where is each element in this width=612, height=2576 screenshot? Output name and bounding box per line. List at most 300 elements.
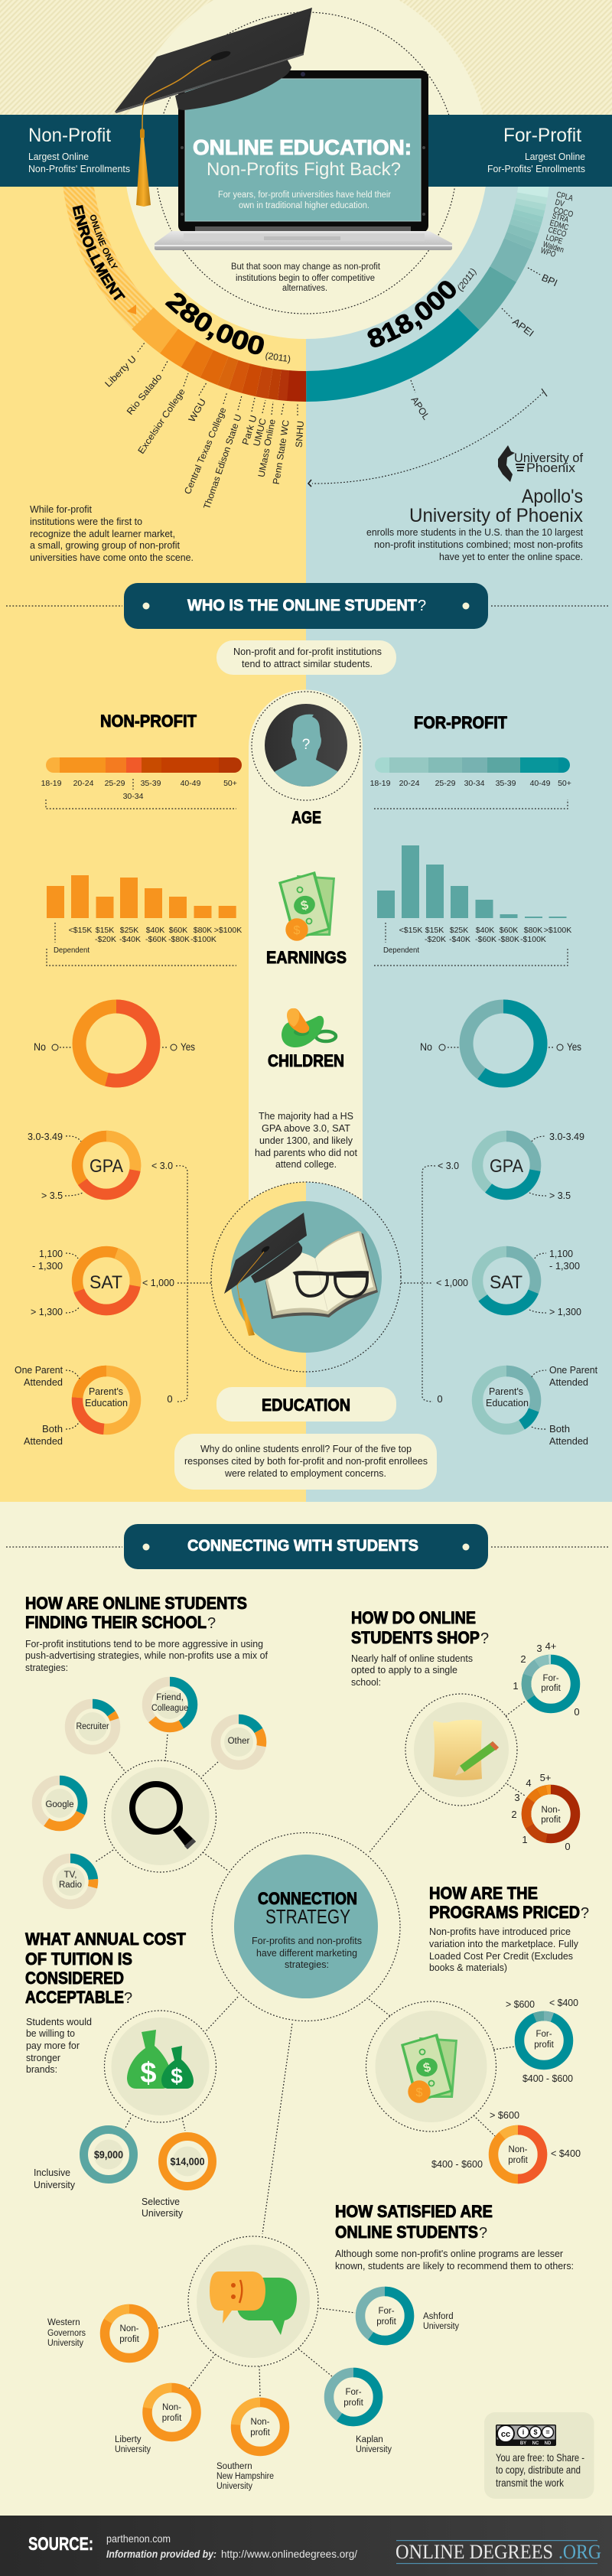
donut: shop for-profit: For- (542, 1674, 559, 1683)
logo: online degrees: ONLINE DEGREES (396, 2541, 553, 2563)
center education text: GPA above 3.0, SAT (262, 1123, 350, 1134)
donut: ashford: Ashford (423, 2312, 454, 2321)
background: for-profit blue side (306, 115, 612, 1502)
parents education donut: for-profit: Parent's (489, 1386, 523, 1397)
for-profit ticker labels: APOL (409, 395, 431, 422)
earnings histogram: for-profit: -$80K (498, 935, 519, 944)
earnings histogram: non-profit: <$15K (69, 926, 92, 935)
donut: price non-profit: Non- (509, 2145, 528, 2154)
earnings histogram: for-profit: $40K (476, 926, 494, 935)
donut: shop non-profit: Non- (542, 1806, 561, 1815)
GPA donut: for-profit: GPA (490, 1156, 523, 1177)
GPA donut: non-profit: < 3.0 (151, 1160, 173, 1171)
donut: western governors: University (47, 2339, 83, 2348)
earnings histogram: for-profit: Dependent (383, 946, 419, 955)
inner cream disc (124, 0, 488, 339)
donut: tv, radio: Radio (59, 1881, 82, 1890)
heading block: how are programs priced: ? (581, 1905, 589, 1922)
non-profit school labels: Park U (240, 414, 259, 446)
parents education donut: non-profit: Education (85, 1398, 128, 1408)
donut: shop for-profit: 1 (513, 1680, 519, 1692)
for-profit header text: For-Profits' Enrollments (487, 164, 585, 174)
SAT donut: for-profit: < 1,000 (436, 1277, 468, 1288)
callout: similar students: tend to attract similar students. (242, 659, 373, 669)
parents education donut: non-profit: Attended (24, 1376, 63, 1388)
SAT donut: non-profit (31, 1248, 174, 1317)
label: enrollment: ENROLLMENT (72, 205, 125, 301)
for-profit ticker labels: DV (554, 197, 565, 209)
earnings histogram: non-profit: $60K (169, 926, 187, 935)
ring: $14,000 selective university: $14,000 (170, 2155, 205, 2167)
solid cream circle with dashed outline behind laptop (155, 12, 457, 314)
SAT donut: non-profit: SAT (90, 1272, 122, 1293)
donut: kaplan: Kaplan (356, 2435, 383, 2444)
non-profit header text (28, 125, 130, 174)
dashed connectors: shop (369, 1702, 525, 1853)
donut: price non-profit: profit (508, 2156, 529, 2165)
donut: friend, colleague: Colleague (151, 1704, 188, 1713)
donut: google: Google (45, 1800, 74, 1809)
heading block: annual cost of tuition (25, 1930, 187, 2075)
non-profit intro text: recognize the adult learner market, (30, 529, 175, 539)
donut: western governors: Western (47, 2318, 80, 2327)
title on laptop screen: Non-Profits Fight Back? (207, 159, 401, 180)
donut: price for-profit (506, 1997, 578, 2084)
donut: kaplan: University (356, 2445, 392, 2454)
age bar: non-profit: 40-49 (181, 779, 201, 788)
dashed connectors: price (369, 1999, 515, 2136)
cream text below laptop: alternatives. (282, 284, 327, 293)
background: connecting section (0, 1502, 612, 2516)
icon: cc badge (496, 2425, 556, 2446)
for-profit ticker labels: CPLA (555, 190, 574, 204)
donut: shop non-profit (511, 1772, 575, 1852)
donut: price for-profit: For- (536, 2030, 552, 2039)
non-profit intro text: While for-profit (30, 504, 93, 515)
age bar: for-profit: 40-49 (530, 779, 551, 788)
icon: paper and pencil (405, 1694, 517, 1806)
header band (0, 115, 612, 187)
Apollo's callout text: Apollo's (522, 486, 583, 507)
earnings histogram: for-profit: -$20K (425, 935, 446, 944)
earnings histogram: for-profit: -$40K (449, 935, 470, 944)
SAT donut: for-profit: 1,100 (549, 1248, 573, 1259)
earnings histogram: non-profit: $15K (96, 926, 114, 935)
heading block: how satisfied: ? (479, 2225, 487, 2242)
donut: southern new hampshire: University (216, 2482, 252, 2491)
earnings histogram: non-profit: $25K (120, 926, 138, 935)
non-profit ring segments (76, 0, 536, 386)
heading block: annual cost of tuition: brands: (26, 2064, 57, 2075)
non-profit school labels: Penn State WC (271, 419, 291, 485)
age bar: for-profit: 30-34 (464, 779, 485, 788)
dashed connectors: tuition (125, 1997, 238, 2131)
footer: Information provided by: (106, 2548, 216, 2560)
central cream column (249, 690, 363, 1277)
logo: University of Phoenix: University of (514, 451, 583, 465)
donut: shop for-profit: 3 (536, 1643, 542, 1654)
Apollo's callout text: have yet to enter the online space. (439, 552, 583, 562)
donut: shop non-profit: 0 (565, 1841, 571, 1852)
for-profit header text (487, 125, 585, 174)
heading: for-profit: FOR-PROFIT (414, 713, 508, 732)
for-profit ticker labels: EDMC (549, 218, 570, 233)
donut: liberty (115, 2388, 196, 2454)
donut: shop for-profit: 4+ (545, 1640, 556, 1652)
parents education donut: for-profit (477, 1364, 597, 1447)
children donut: non-profit: Yes (181, 1040, 195, 1053)
center education text: under 1300, and likely (259, 1135, 353, 1146)
donut: kaplan: For- (345, 2388, 362, 2397)
donut: price for-profit: profit (534, 2040, 555, 2050)
earnings histogram: for-profit: $60K (500, 926, 518, 935)
icon: pacifier (282, 1008, 336, 1047)
donut: shop for-profit: profit (541, 1684, 562, 1693)
heading block: annual cost of tuition: CONSIDERED (25, 1969, 124, 1988)
non-profit school labels: Thomas Edison State U (201, 413, 244, 510)
heading block: annual cost of tuition: stronger (26, 2053, 60, 2063)
heading block: annual cost of tuition: OF TUITION IS (25, 1949, 132, 1969)
non-profit intro text: universities have come onto the scene. (30, 552, 194, 563)
SAT donut: for-profit: - 1,300 (549, 1260, 580, 1272)
heading block: how satisfied: Although some non-profit's online programs are lesser (335, 2249, 563, 2259)
heading block: how are students finding school: HOW ARE ONLINE STUDENTS (25, 1594, 247, 1613)
icon: cc badge: $ (533, 2428, 538, 2436)
donut: friend, colleague: Friend, (156, 1693, 184, 1702)
Apollo's callout text (366, 486, 584, 562)
title on laptop screen: For years, for-profit universities have held their (218, 191, 391, 200)
parents education donut: for-profit: Attended (549, 1435, 588, 1447)
icon: money bags: $ (140, 2057, 157, 2089)
earnings histogram: for-profit: -$100K (520, 935, 546, 944)
ring: $9,000 inclusive university: Inclusive (34, 2167, 70, 2178)
heading block: how satisfied: HOW SATISFIED ARE (335, 2202, 493, 2221)
logo: University of Phoenix: Phoenix (526, 461, 576, 475)
center circle: connection strategy: CONNECTION (258, 1889, 357, 1908)
age bar: non-profit: 20-24 (73, 779, 94, 788)
center circle: connection strategy (212, 1833, 400, 2021)
parents education donut: for-profit: One Parent (549, 1364, 597, 1376)
for-profit ticker labels: APEI (510, 316, 536, 339)
non-profit header text: Non-Profit (28, 125, 111, 146)
donut: price for-profit: > $600 (506, 1998, 535, 2010)
donut: price for-profit: $400 - $600 (522, 2073, 573, 2084)
logo: online degrees: .ORG (558, 2541, 601, 2563)
donut: recruiter (70, 1704, 116, 1750)
icon: cc badge: ND (545, 2441, 552, 2446)
age bar: for-profit: 25-29 (435, 779, 456, 788)
ring: $14,000 selective university (142, 2136, 213, 2219)
footer (0, 2516, 612, 2576)
non-profit intro text (30, 504, 194, 563)
for-profit header text: For-Profit (503, 125, 581, 146)
earnings histogram: non-profit: >$100K (214, 926, 242, 935)
SAT donut: non-profit: - 1,300 (32, 1260, 63, 1272)
center education text: had parents who did not (255, 1148, 358, 1158)
age bar: for-profit (370, 757, 571, 809)
title on laptop screen (193, 135, 412, 210)
icon: money on dashed disc (366, 2001, 496, 2131)
donut: liberty: profit (162, 2414, 182, 2423)
age bar: for-profit: 50+ (558, 779, 571, 788)
for-profit ticker labels: WPO (539, 246, 557, 259)
donut: other: Other (228, 1737, 250, 1746)
laptop (155, 70, 452, 250)
parents education donut: non-profit: Attended (24, 1435, 63, 1447)
for-profit ticker labels: CECO (547, 225, 568, 239)
donut: price non-profit: $400 - $600 (431, 2158, 483, 2170)
donut: western governors: profit (119, 2335, 140, 2344)
icon: cc badge: = (545, 2428, 550, 2436)
for-profit ticker labels: COCO (552, 205, 574, 220)
non-profit school labels: SNHU (294, 421, 306, 448)
GPA donut: for-profit (438, 1131, 584, 1201)
age bar: non-profit: 25-29 (105, 779, 125, 788)
callout: similar students (216, 640, 396, 675)
ring: $9,000 inclusive university: $9,000 (94, 2148, 123, 2161)
center education text (255, 1111, 358, 1170)
cream text below laptop: But that soon may change as non-profit (231, 262, 381, 272)
heading block: how satisfied: known, students are likely to recommend them to others: (335, 2261, 574, 2272)
dotted arrow to non-profit side (308, 389, 547, 487)
SAT donut: for-profit: > 1,300 (549, 1306, 581, 1317)
heading block: how are programs priced: Non-profits have introduced price (429, 1926, 571, 1937)
ring: $14,000 selective university: Selective (142, 2197, 180, 2207)
earnings histogram: non-profit: $40K (146, 926, 164, 935)
for-profit ticker labels: BPI (540, 272, 559, 288)
heading block: how do students shop: STUDENTS SHOP (351, 1628, 480, 1647)
parents education donut: non-profit: One Parent (15, 1364, 63, 1376)
donut: kaplan (329, 2372, 392, 2454)
heading block: how are programs priced: variation into the marketplace. Fully (429, 1939, 579, 1949)
icon: magnifying glass (104, 1760, 216, 1872)
donut: southern new hampshire: Non- (251, 2418, 270, 2427)
pill: education label: EDUCATION (262, 1395, 350, 1415)
non-profit intro text: a small, growing group of non-profit (30, 540, 181, 551)
donut: shop non-profit: 4 (526, 1777, 532, 1789)
donut: price non-profit (431, 2109, 581, 2179)
parents education donut: for-profit: Both (549, 1423, 570, 1435)
cream text below laptop (231, 262, 381, 293)
earnings histogram: for-profit: $15K (425, 926, 444, 935)
parents education donut: for-profit: Attended (549, 1376, 588, 1388)
title on laptop screen: ONLINE EDUCATION: (193, 135, 412, 159)
ring: $14,000 selective university: University (142, 2208, 184, 2219)
earnings histogram: non-profit: -$40K (119, 935, 141, 944)
earnings histogram: non-profit: -$100K (190, 935, 216, 944)
donut: price non-profit: < $400 (551, 2148, 581, 2159)
heading block: annual cost of tuition: be willing to (26, 2028, 75, 2039)
age bar: non-profit: 35-39 (141, 779, 161, 788)
donut: southern new hampshire: Southern (216, 2462, 252, 2471)
dashed connectors: satisfied (158, 2024, 355, 2396)
GPA donut: for-profit: > 3.5 (549, 1190, 571, 1201)
icon: money bags: $ (171, 2064, 183, 2088)
heading block: annual cost of tuition: pay more for (26, 2040, 80, 2051)
pill: education label (216, 1387, 396, 1422)
year: 2011 non-profit: (2011) (265, 352, 291, 364)
creative commons box: to copy, distribute and (496, 2464, 581, 2476)
footer: SOURCE: (28, 2534, 93, 2555)
heading block: how are programs priced (429, 1884, 589, 1973)
donut: southern new hampshire: New Hampshire (216, 2472, 274, 2481)
for-profit ticker labels: Walden (542, 239, 565, 255)
icon: speech bubbles (188, 2236, 318, 2366)
dotted connectors: education (167, 1166, 443, 1405)
cream text below laptop: institutions begin to offer competitive (236, 274, 375, 283)
callout: why enroll: Why do online students enroll? Four of the five top (200, 1444, 412, 1454)
section banner: connecting with students (6, 1524, 608, 1569)
donut: tv, radio: TV, (64, 1871, 76, 1880)
heading block: how satisfied: ONLINE STUDENTS (335, 2223, 478, 2242)
children donut: non-profit (34, 1007, 195, 1080)
non-profit school labels: Liberty U (103, 353, 138, 389)
dashed connectors: finding school (95, 1734, 228, 1871)
age bar: non-profit (41, 757, 242, 809)
non-profit school labels: Rio Salado (125, 371, 164, 417)
Apollo's callout text: enrolls more students in the U.S. than the 10 largest (366, 527, 584, 538)
dotted connectors: education: 0 (167, 1393, 173, 1405)
donut: southern new hampshire: profit (250, 2428, 271, 2438)
donut: liberty: Non- (162, 2403, 181, 2412)
callout: why enroll: were related to employment concerns. (224, 1468, 386, 1479)
SAT donut: for-profit (436, 1248, 581, 1317)
logo: University of Phoenix (498, 445, 583, 482)
icon: money (278, 871, 335, 941)
center circle: connection strategy: strategies: (285, 1959, 329, 1970)
parents education donut: non-profit (15, 1364, 135, 1447)
for-profit ticker labels: STRA (551, 211, 570, 225)
heading block: how satisfied (335, 2202, 574, 2272)
heading block: how do students shop: ? (480, 1630, 489, 1647)
icon: open book (265, 1231, 378, 1319)
non-profit school labels: Central Texas College (182, 405, 229, 496)
earnings histogram: for-profit: $25K (450, 926, 468, 935)
donut: ashford (360, 2291, 459, 2340)
heading block: how are students finding school: strategies: (25, 1663, 68, 1673)
donut: ashford: For- (378, 2307, 395, 2316)
center circle: connection strategy: STRATEGY (265, 1905, 350, 1928)
heading block: annual cost of tuition: Students would (26, 2017, 92, 2027)
education disc and art (211, 1182, 401, 1372)
non-profit school labels (103, 343, 306, 510)
number: 280,000: 280,000 (165, 292, 264, 355)
label: online only: ONLINE ONLY (90, 214, 118, 269)
ring: $9,000 inclusive university: University (34, 2180, 76, 2190)
heading block: how are programs priced: PROGRAMS PRICED (429, 1903, 580, 1922)
age bar: non-profit: 18-19 (41, 779, 62, 788)
non-profit school labels: UMass Online (256, 418, 278, 478)
donut: western governors: Non- (120, 2324, 139, 2333)
heading block: how are students finding school (25, 1594, 269, 1673)
ring: $9,000 inclusive university (34, 2130, 133, 2190)
donut: liberty: Liberty (115, 2435, 142, 2444)
earnings histogram: non-profit: -$60K (145, 935, 167, 944)
donut: ashford: profit (376, 2317, 397, 2327)
age bar: for-profit: 20-24 (399, 779, 420, 788)
SAT donut: non-profit: > 1,300 (31, 1306, 63, 1317)
heading block: how do students shop: Nearly half of online students (351, 1653, 473, 1664)
GPA donut: non-profit: GPA (90, 1156, 123, 1177)
enrollment ring chart (63, 0, 549, 402)
heading: non-profit: NON-PROFIT (100, 712, 197, 731)
heading block: how are programs priced: HOW ARE THE (429, 1884, 538, 1903)
icon: cc badge: NC (532, 2441, 539, 2446)
donut: shop non-profit: 5+ (540, 1772, 551, 1783)
donut: shop non-profit: 2 (511, 1809, 517, 1820)
donut: western governors: Governors (47, 2329, 86, 2338)
heading block: how are students finding school: push-advertising strategies, while non-profits use a mix of (25, 1650, 269, 1661)
center education text: attend college. (275, 1159, 337, 1170)
footer: http://www.onlinedegrees.org/ (221, 2548, 357, 2560)
year: 2011 for-profit: (2011) (457, 269, 477, 292)
earnings histogram: non-profit (47, 875, 242, 966)
heading block: how are students finding school: For-profit institutions tend to be more aggressive in using (25, 1639, 263, 1649)
age bar: non-profit: 50+ (223, 779, 237, 788)
label: children: CHILDREN (268, 1051, 344, 1070)
donut: price for-profit: < $400 (549, 1997, 578, 2008)
icon: glasses (294, 1273, 369, 1297)
creative commons box: You are free: to Share - (496, 2451, 584, 2464)
SAT donut: non-profit: < 1,000 (142, 1277, 174, 1288)
non-profit school labels: WGU (186, 396, 208, 424)
heading block: how do students shop: school: (351, 1677, 381, 1688)
donut: recruiter: Recruiter (76, 1722, 109, 1731)
donut: western governors (47, 2309, 154, 2358)
earnings histogram: for-profit (374, 845, 571, 966)
for-profit ring segments (76, 0, 536, 386)
heading block: annual cost of tuition: ? (124, 1990, 132, 2007)
section banner: who is the online student (6, 583, 608, 629)
non-profit header text: Largest Online (28, 151, 89, 162)
pointer triangle (127, 304, 136, 314)
creative commons box: transmit the work (496, 2477, 565, 2489)
children donut: for-profit: Yes (567, 1040, 581, 1053)
Apollo's callout text: non-profit institutions combined; most non-profits (374, 539, 583, 550)
earnings histogram: for-profit: <$15K (399, 926, 422, 935)
center circle: connection strategy: have different marketing (256, 1948, 357, 1959)
graduation cap (115, 8, 312, 207)
label: age: AGE (291, 808, 321, 827)
heading block: how do students shop: opted to apply to a single (351, 1665, 457, 1676)
earnings histogram: non-profit: -$20K (95, 935, 116, 944)
callout: why enroll: responses cited by both for-profit and non-profit enrollees (184, 1456, 428, 1467)
background: hatched header (0, 0, 612, 115)
GPA donut: non-profit: 3.0-3.49 (28, 1131, 63, 1142)
parents education donut: for-profit: Education (486, 1398, 529, 1408)
children donut: for-profit (420, 1007, 581, 1080)
age bar: non-profit: 30-34 (123, 792, 144, 801)
donut: friend, colleague (147, 1682, 193, 1728)
heading block: how do students shop (351, 1608, 489, 1688)
heading block: annual cost of tuition: WHAT ANNUAL COST (25, 1930, 187, 1949)
non-profit school labels: UMUC (251, 417, 269, 448)
GPA donut: for-profit: 3.0-3.49 (549, 1131, 584, 1142)
icon: cc badge: i (522, 2428, 524, 2436)
number: 818,000: 818,000 (367, 281, 456, 347)
parents education donut: non-profit: Parent's (89, 1386, 123, 1397)
background: non-profit yellow side (0, 115, 306, 1502)
donut: ashford: University (423, 2322, 459, 2331)
donut: google (37, 1780, 83, 1826)
non-profit header text: Non-Profits' Enrollments (28, 164, 130, 174)
icon: anonymous student: ? (302, 737, 310, 753)
SAT donut: for-profit: SAT (490, 1272, 522, 1293)
age bar: for-profit: 18-19 (370, 779, 391, 788)
callout: similar students: Non-profit and for-profit institutions (233, 646, 382, 657)
earnings histogram: for-profit: $80K (524, 926, 542, 935)
dotted connectors: education: 0 (437, 1393, 443, 1405)
